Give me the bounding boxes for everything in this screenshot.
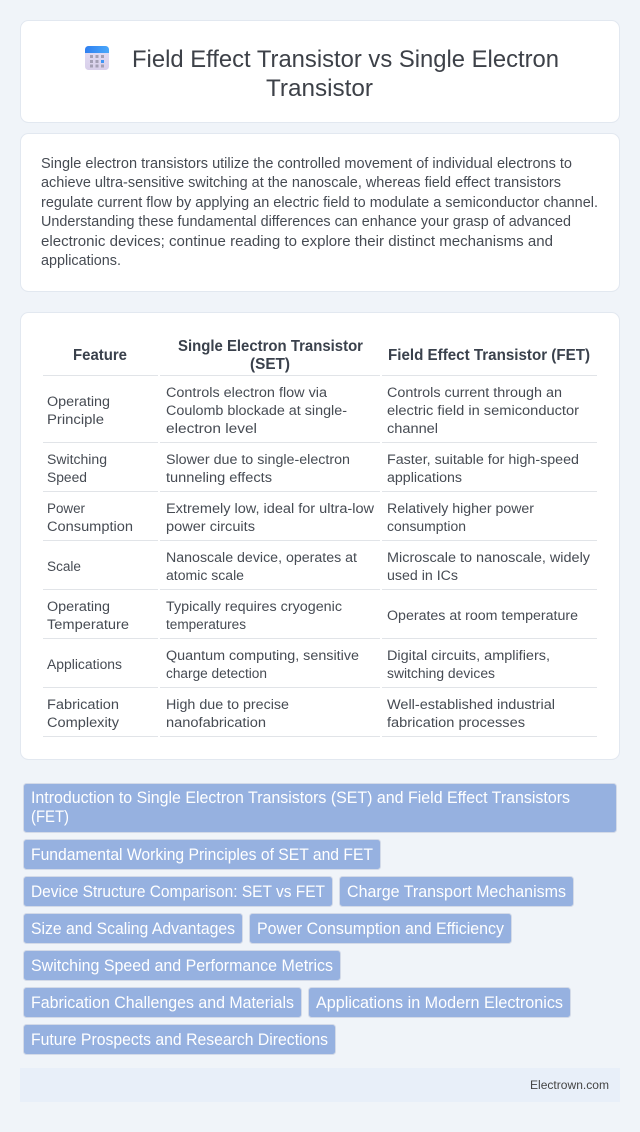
row: power consumption: Power — [47, 501, 85, 517]
row: fabrication complexity: nanofabrication — [166, 715, 266, 731]
tag: charge transport — [340, 876, 574, 906]
table header: Feature — [73, 347, 127, 364]
row: operating principle: Coulomb blockade at single- — [166, 403, 347, 419]
row: switching speed: Faster, suitable for high-speed — [387, 452, 579, 468]
tag: introduction: Introduction to Single Electron Transistors (SET) and Field Effect Transistors — [31, 789, 570, 807]
row: switching speed: Switching — [47, 452, 107, 468]
tag: device structure: Device Structure Comparison: SET vs FET — [31, 883, 325, 901]
row: operating temperature: Operating — [47, 599, 110, 615]
row: operating principle — [47, 385, 579, 437]
row: operating temperature: temperatures — [166, 617, 246, 633]
row: scale: Scale — [47, 559, 81, 575]
tag: charge transport: Charge Transport Mechanisms — [347, 883, 566, 901]
row: switching speed — [47, 452, 579, 486]
row: operating temperature: Operates at room temperature — [387, 608, 578, 624]
intro text: electronic devices; continue reading to explore their distinct mechanisms and — [41, 234, 553, 250]
footer: Electrown.com — [530, 1078, 609, 1092]
row: applications: Digital circuits, amplifiers, — [387, 648, 550, 664]
panel: comparison table — [20, 312, 620, 760]
row: switching speed: applications — [387, 470, 462, 486]
row: switching speed: Slower due to single-electron — [166, 452, 350, 468]
row: applications — [47, 648, 550, 682]
row: applications: Quantum computing, sensitive — [166, 648, 359, 664]
tag: working principles: Fundamental Working Principles of SET and FET — [31, 846, 373, 864]
tag: introduction — [24, 784, 616, 832]
table header: (SET) — [250, 356, 290, 373]
tag: fabrication: Fabrication Challenges and Materials — [31, 994, 294, 1012]
table header — [73, 338, 590, 373]
row: scale: Nanoscale device, operates at — [166, 550, 357, 566]
panel: introduction — [20, 134, 620, 292]
tag: introduction: (FET) — [31, 808, 69, 826]
row: operating principle: Controls electron flow via — [166, 385, 327, 401]
icon: calendar grid — [85, 46, 109, 70]
tag: fabrication — [24, 988, 302, 1018]
row: scale: Microscale to nanoscale, widely — [387, 550, 591, 566]
intro text — [41, 156, 598, 269]
table header: Field Effect Transistor (FET) — [388, 347, 590, 364]
row: applications: switching devices — [387, 666, 495, 682]
intro text: applications. — [41, 253, 121, 269]
tag: future prospects: Future Prospects and Research Directions — [31, 1031, 328, 1049]
tag: power consumption — [250, 914, 512, 944]
tag: switching speed — [24, 950, 340, 980]
footer — [20, 1068, 620, 1102]
row: switching speed: tunneling effects — [166, 470, 272, 486]
header panel — [20, 20, 620, 122]
topic tags — [24, 784, 616, 1054]
row: operating principle: channel — [387, 421, 438, 437]
tag: working principles — [24, 840, 380, 870]
row: operating principle: Principle — [47, 412, 104, 428]
row: applications: Applications — [47, 657, 122, 673]
tag: size and scaling — [24, 914, 242, 944]
title — [132, 46, 559, 102]
row: operating principle: electric field in semiconductor — [387, 403, 579, 419]
row: power consumption: Consumption — [47, 519, 133, 535]
row: power consumption: Relatively higher power — [387, 501, 534, 517]
title: Field Effect Transistor vs Single Electron — [132, 46, 559, 73]
tag: future prospects — [24, 1024, 336, 1054]
row: power consumption: consumption — [387, 519, 466, 535]
table header: Single Electron Transistor — [178, 338, 363, 355]
row: scale: atomic scale — [166, 568, 244, 584]
row: fabrication complexity — [47, 697, 555, 731]
tag: device structure — [24, 876, 332, 906]
row: scale — [47, 550, 591, 584]
tag: switching speed: Switching Speed and Performance Metrics — [31, 957, 333, 975]
row: switching speed: Speed — [47, 470, 87, 486]
tag: applications — [308, 988, 570, 1018]
intro text: regulate current flow by applying an electric field to modulate a semiconductor channel. — [41, 195, 598, 211]
row: power consumption: Extremely low, ideal for ultra-low — [166, 501, 375, 517]
intro text: Understanding these fundamental differences can enhance your grasp of advanced — [41, 214, 571, 230]
tag: power consumption: Power Consumption and Efficiency — [257, 920, 505, 938]
row: power consumption: power circuits — [166, 519, 255, 535]
intro text: Single electron transistors utilize the controlled movement of individual electrons to — [41, 156, 572, 172]
intro text: achieve ultra-sensitive switching at the nanoscale, whereas field effect transistors — [41, 175, 561, 191]
row: scale: used in ICs — [387, 568, 458, 584]
row: fabrication complexity: Well-established industrial — [387, 697, 555, 713]
row: applications: charge detection — [166, 666, 267, 682]
row: operating principle: electron level — [166, 421, 257, 437]
tag: size and scaling: Size and Scaling Advantages — [31, 920, 235, 938]
row: operating temperature: Temperature — [47, 617, 129, 633]
row: power consumption — [47, 501, 534, 535]
row: fabrication complexity: Complexity — [47, 715, 120, 731]
row: fabrication complexity: Fabrication — [47, 697, 119, 713]
row: fabrication complexity: High due to precise — [166, 697, 289, 713]
row: operating temperature — [47, 599, 578, 633]
row: fabrication complexity: fabrication processes — [387, 715, 525, 731]
row: operating principle: Operating — [47, 394, 110, 410]
title: Transistor — [266, 75, 373, 102]
row: operating principle: Controls current through an — [387, 385, 562, 401]
tag: applications: Applications in Modern Electronics — [316, 994, 563, 1012]
row: operating temperature: Typically requires cryogenic — [166, 599, 342, 615]
